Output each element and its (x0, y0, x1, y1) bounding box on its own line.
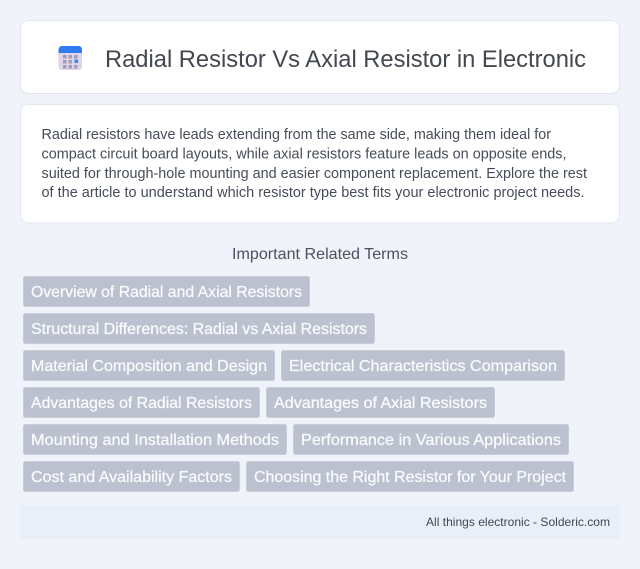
description text: of the article to understand which resistor type best fits your electronic project needs. (42, 185, 584, 201)
tag: material composition: Material Composition and Design (31, 358, 267, 375)
description text: compact circuit board layouts, while axial resistors feature leads on opposite ends, (42, 146, 566, 162)
tag: advantages radial: Advantages of Radial Resistors (31, 395, 252, 412)
tag: electrical characteristics (282, 350, 564, 380)
tag: performance: Performance in Various Applications (301, 432, 561, 449)
tag: material composition (24, 350, 274, 380)
tag: advantages radial (24, 388, 260, 418)
title: Radial Resistor Vs Axial Resistor in Electronic (105, 46, 586, 73)
heading: important related terms: Important Related Terms (232, 246, 408, 263)
tag: advantages axial: Advantages of Axial Resistors (274, 395, 487, 412)
tag: choosing (246, 462, 574, 492)
tag: advantages axial (266, 388, 494, 418)
tag: structural differences (24, 314, 374, 344)
description text: suited for through-hole mounting and easier component replacement. Explore the rest (42, 166, 587, 182)
panel: description card (20, 104, 620, 223)
tag: cost (24, 462, 240, 492)
description text (42, 127, 587, 201)
tag: choosing: Choosing the Right Resistor for Your Project (254, 469, 567, 486)
description text: Radial resistors have leads extending from the same side, making them ideal for (42, 127, 551, 143)
tag: overview: Overview of Radial and Axial Resistors (31, 284, 302, 301)
tag: overview (24, 276, 310, 306)
footer (20, 505, 620, 539)
tag: electrical characteristics: Electrical Characteristics Comparison (289, 358, 557, 375)
tag: mounting (24, 424, 286, 454)
panel: title card (20, 20, 620, 94)
related terms tags (24, 276, 574, 492)
tag: mounting: Mounting and Installation Methods (31, 432, 279, 449)
tag: structural differences: Structural Differences: Radial vs Axial Resistors (31, 321, 367, 338)
icon: calendar (58, 46, 82, 70)
tag: cost: Cost and Availability Factors (31, 469, 232, 486)
footer: All things electronic - Solderic.com (426, 515, 610, 529)
tag: performance (294, 424, 568, 454)
